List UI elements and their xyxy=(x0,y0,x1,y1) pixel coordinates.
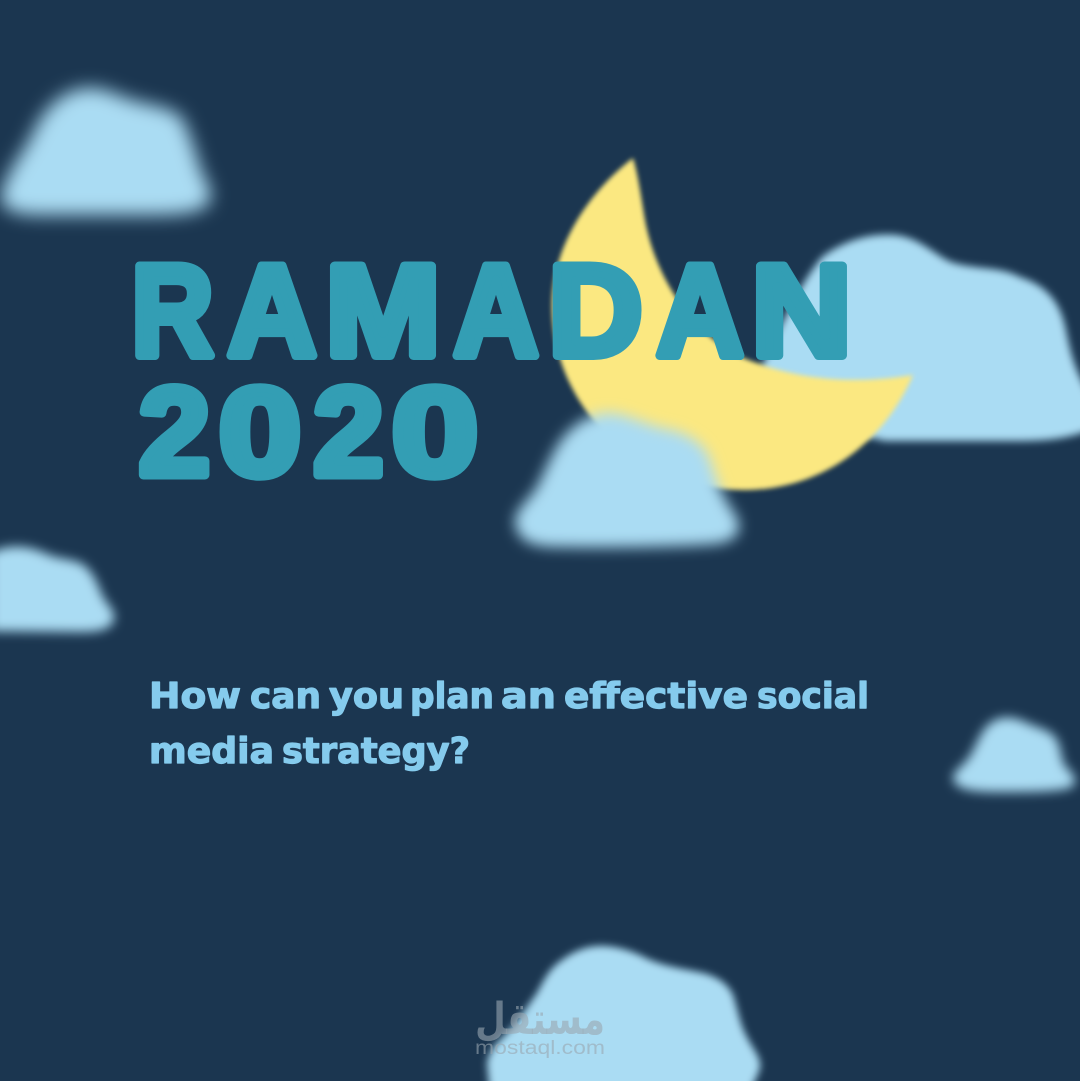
cloud: right, behind moon xyxy=(760,235,1080,441)
subtitle line 1: plan xyxy=(410,676,494,717)
subtitle line 1: How xyxy=(149,676,241,717)
subtitle line 1: you xyxy=(329,676,404,717)
title line: 2020: 2 xyxy=(314,363,384,502)
subtitle line 1: can xyxy=(250,676,321,717)
icon: crescent moon xyxy=(552,158,913,490)
cloud: centre, over moon xyxy=(515,413,739,547)
title line: RAMADAN: N xyxy=(752,238,852,384)
subtitle line 2: strategy? xyxy=(282,731,470,772)
subtitle line 2: media xyxy=(149,731,274,772)
subtitle line 1: an xyxy=(501,676,556,717)
watermark: arabic logotype: مستقل xyxy=(475,994,605,1045)
title line: 2020: 0 xyxy=(392,363,478,502)
title line: RAMADAN: A xyxy=(228,238,316,384)
title line: 2020: 2 xyxy=(139,363,210,502)
title xyxy=(132,238,852,502)
watermark: domain: mostaql.com xyxy=(475,1038,605,1059)
watermark xyxy=(475,994,605,1059)
cloud: right small xyxy=(953,717,1075,792)
title line: RAMADAN: M xyxy=(326,238,440,384)
title line: RAMADAN: R xyxy=(132,238,214,384)
cloud: bottom xyxy=(487,946,760,1081)
subtitle line 1: effective xyxy=(564,676,748,717)
title line: RAMADAN: A xyxy=(454,238,538,384)
subtitle line 1: social xyxy=(757,676,869,717)
cloud: top left xyxy=(1,88,211,215)
cloud: left xyxy=(0,547,114,632)
title line: RAMADAN: D xyxy=(548,238,642,384)
title line: 2020: 0 xyxy=(219,363,301,502)
title line: RAMADAN: A xyxy=(656,238,744,384)
subtitle xyxy=(149,676,869,772)
